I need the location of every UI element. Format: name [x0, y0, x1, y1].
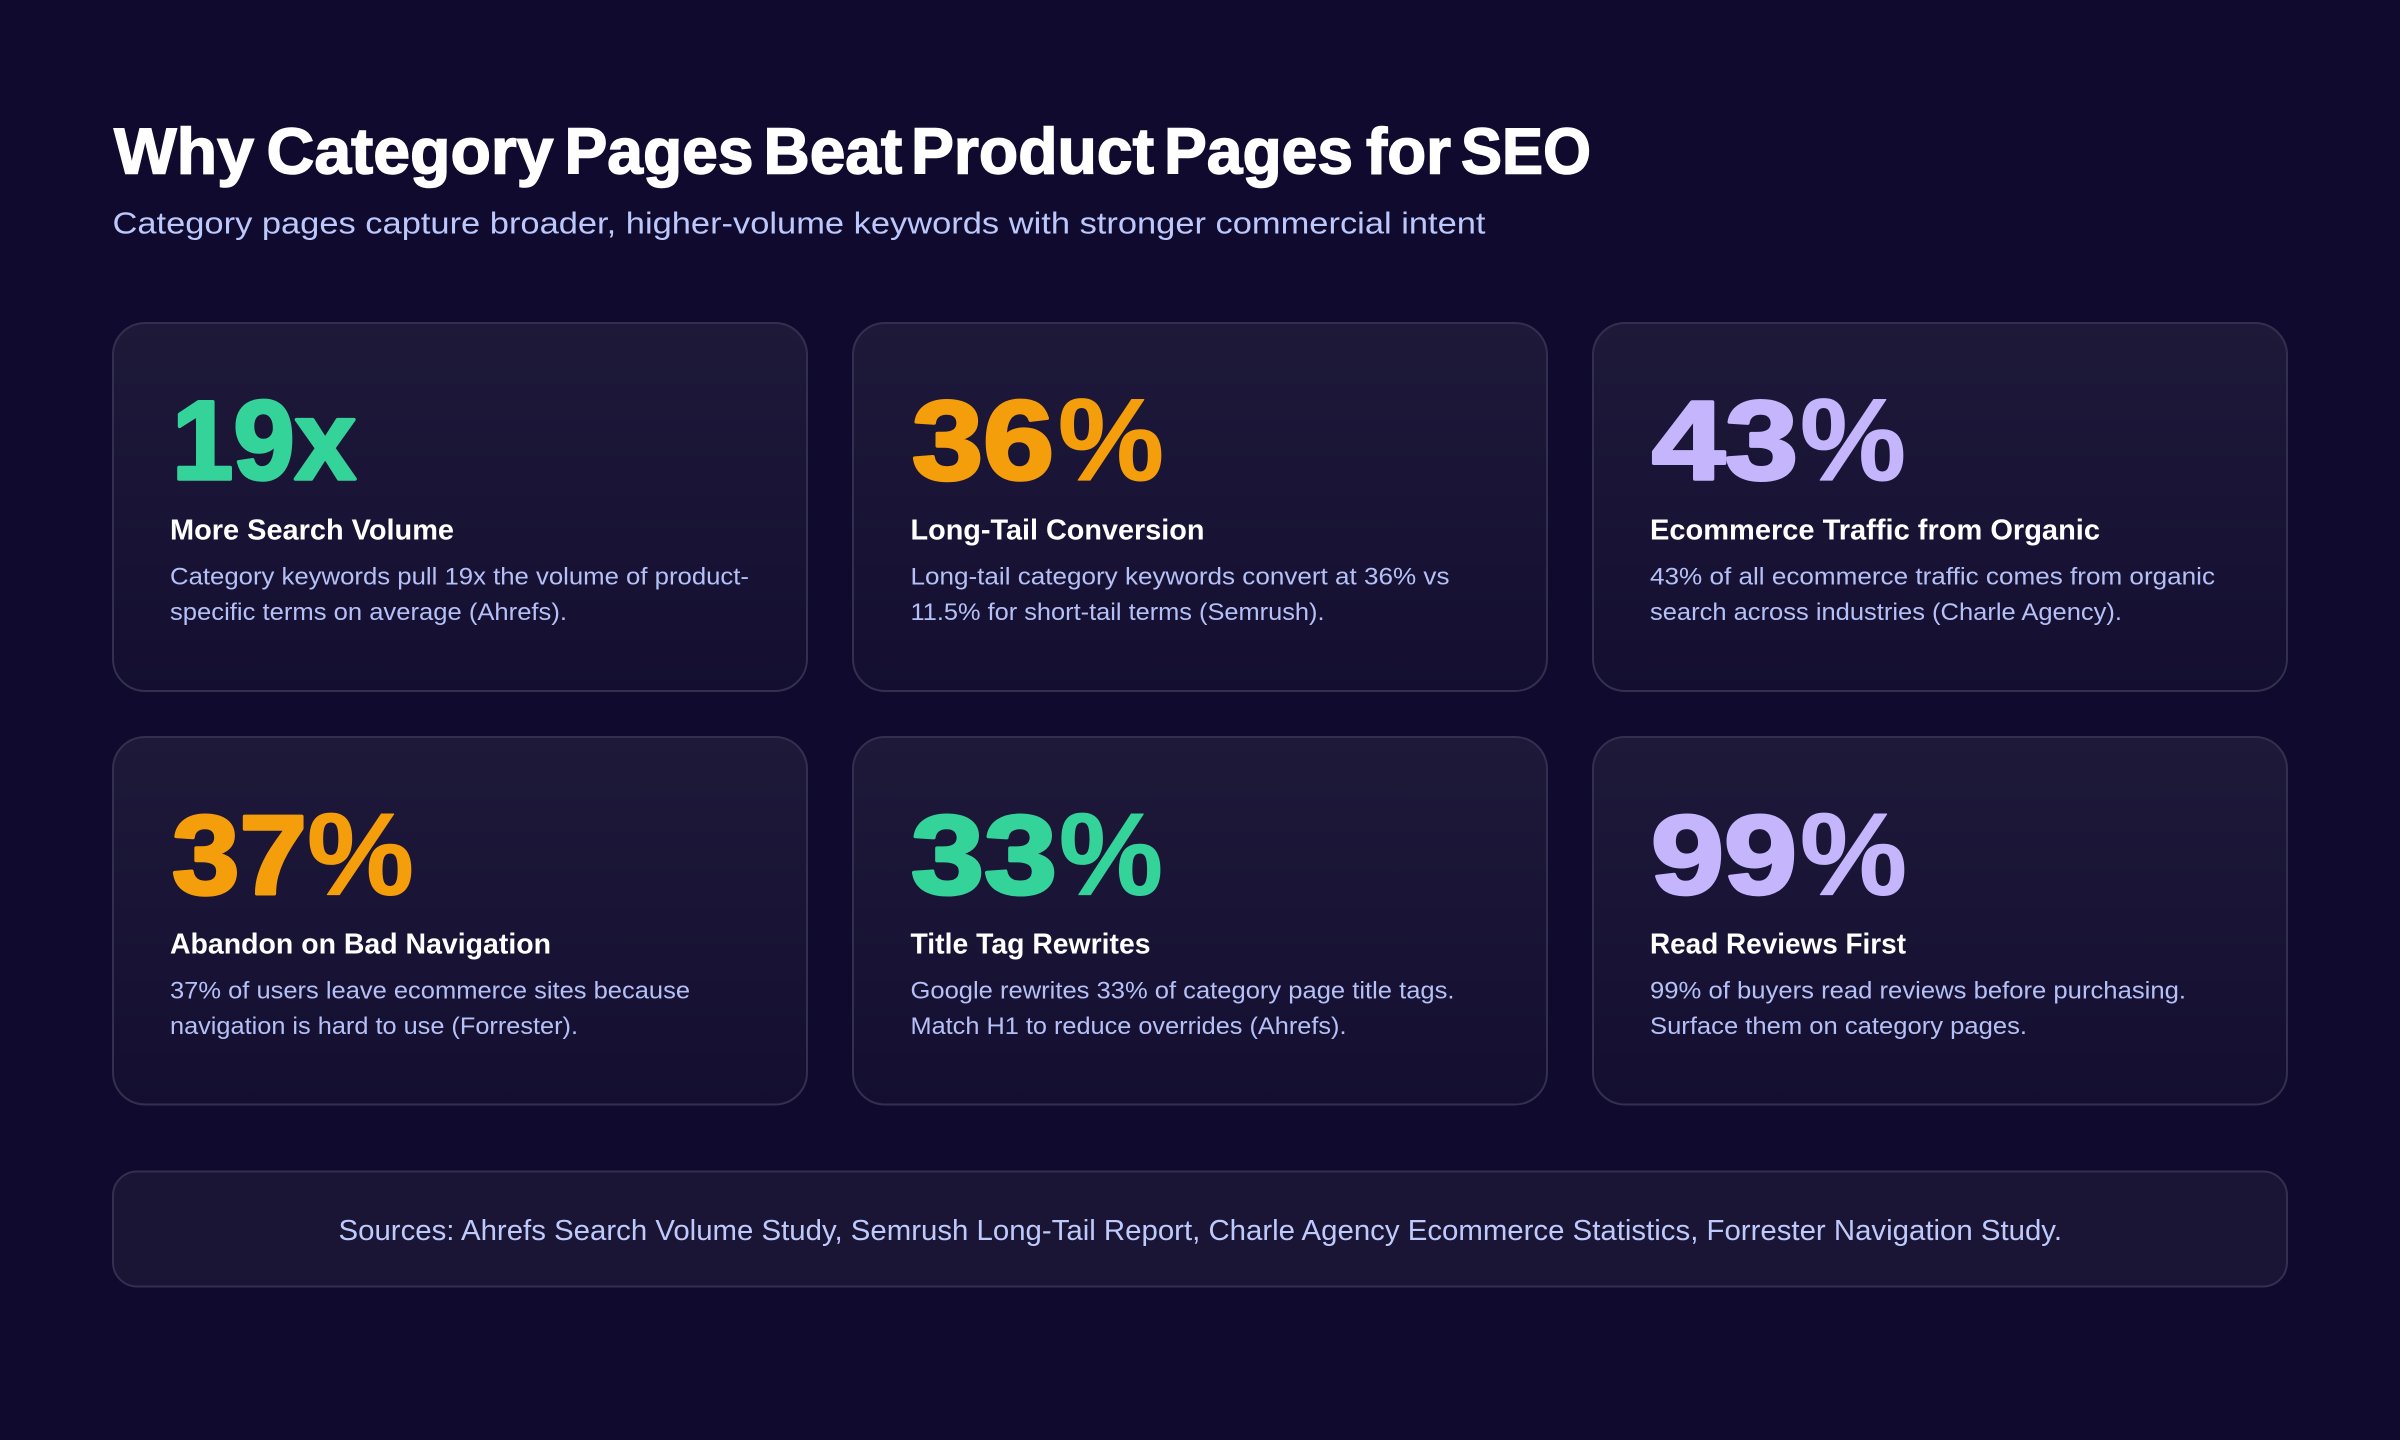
description line 2: specific terms on average (Ahrefs).: [170, 599, 567, 626]
panel: 36% long-tail conversion: [853, 323, 1547, 691]
stat: 99%: 99: [1651, 792, 1797, 918]
title: Pages: [1164, 114, 1353, 188]
stat: 36%: %: [1058, 374, 1164, 505]
stat: 19x: 19x: [172, 378, 356, 503]
title: [114, 114, 1591, 188]
panel: 37% abandon on bad navigation: [113, 737, 807, 1104]
stat: 99%: [1651, 788, 1907, 920]
stat: 37%: 37: [172, 792, 307, 918]
stat: 36%: 36: [912, 378, 1054, 503]
stat: 37%: %: [307, 788, 414, 920]
title: Pages: [564, 114, 754, 188]
description: 43% of all ecommerce traffic comes from organic: [1650, 564, 2215, 590]
description line 2: Surface them on category pages.: [1650, 1013, 2027, 1040]
title: Category: [266, 114, 554, 188]
stat: 99%: %: [1800, 788, 1907, 920]
stat: 33%: %: [1059, 788, 1163, 920]
heading: read reviews first: Read Reviews First: [1650, 928, 1906, 960]
panel: 43% ecommerce traffic: [1593, 323, 2287, 691]
stat: 37%: [172, 788, 414, 920]
heading: abandon on bad navigation: Abandon on Bad Navigation: [170, 928, 551, 960]
title: Why: [114, 114, 254, 188]
title: for: [1366, 114, 1451, 188]
description: Google rewrites 33% of category page title tags.: [910, 978, 1454, 1004]
description line 2: Match H1 to reduce overrides (Ahrefs).: [910, 1013, 1346, 1040]
description: Long-tail category keywords convert at 36% vs: [910, 564, 1450, 590]
title: Product: [911, 114, 1154, 188]
sources text: Sources: Ahrefs Search Volume Study, Semrush Long-Tail Report, Charle Agency Ecommerce Statistics, Forrester Navigation Study.: [338, 1215, 2062, 1247]
description: 37% of users leave ecommerce sites because: [170, 978, 690, 1004]
stat: 43%: [1652, 374, 1906, 505]
heading: title tag rewrites: Title Tag Rewrites: [910, 928, 1150, 960]
description: 99% of buyers read reviews before purchasing.: [1650, 978, 2186, 1004]
description line 2: search across industries (Charle Agency).: [1650, 599, 2122, 626]
stat: 33%: 33: [911, 792, 1057, 918]
stat: 43%: %: [1800, 374, 1906, 505]
panel: 33% title tag rewrites: [853, 737, 1547, 1104]
stat: 33%: [911, 788, 1163, 920]
heading: long-tail conversion: Long-Tail Conversion: [910, 514, 1204, 546]
title: Beat: [764, 114, 902, 188]
stat: 43%: 43: [1652, 378, 1798, 503]
description: Category keywords pull 19x the volume of product-: [170, 564, 749, 590]
heading: ecommerce traffic from organic: Ecommerce Traffic from Organic: [1650, 514, 2100, 546]
panel: 99% read reviews first: [1593, 737, 2287, 1104]
panel: 19x more search volume: [113, 323, 807, 691]
title: SEO: [1461, 114, 1591, 188]
subtitle: Category pages capture broader, higher-volume keywords with stronger commercial intent: [112, 206, 1486, 240]
stat: 36%: [912, 374, 1164, 505]
description line 2: 11.5% for short-tail terms (Semrush).: [910, 599, 1324, 626]
footer: sources: [113, 1172, 2287, 1286]
heading: more search volume: More Search Volume: [170, 514, 454, 546]
description line 2: navigation is hard to use (Forrester).: [170, 1013, 578, 1040]
